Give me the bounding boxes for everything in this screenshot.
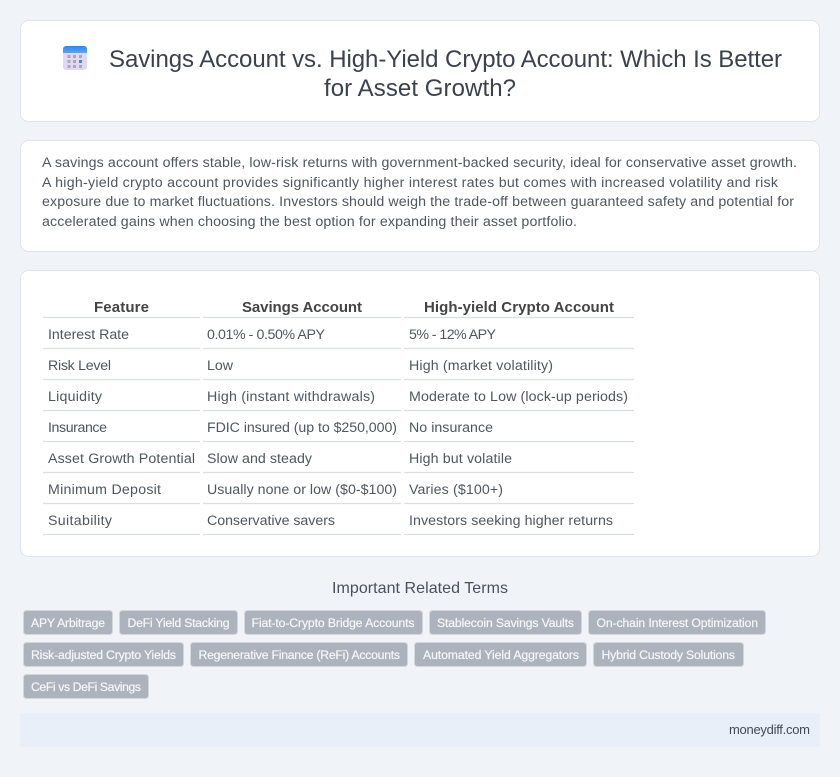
tag: APY Arbitrage: [31, 616, 105, 630]
row: insurance: FDIC insured (up to $250,000): [207, 420, 397, 436]
text block: summary paragraph: accelerated gains when choosing the best option for expanding their asset portfolio.: [42, 214, 577, 230]
row: insurance: Insurance: [48, 420, 107, 436]
tag: CeFi vs DeFi Savings: [31, 680, 141, 694]
table header: High-yield Crypto Account: [424, 299, 614, 316]
panel: summary: [20, 140, 820, 252]
row: liquidity: [48, 389, 628, 405]
tag: DeFi Yield Stacking: [128, 616, 230, 630]
row: liquidity: Moderate to Low (lock-up periods): [409, 389, 628, 405]
row: risk level: [48, 358, 553, 374]
row: suitability: Conservative savers: [207, 513, 335, 529]
tag: Risk-adjusted Crypto Yields: [31, 648, 176, 662]
title: [109, 46, 782, 102]
tag: [24, 610, 112, 634]
row: suitability: [48, 513, 613, 529]
tag: [430, 610, 582, 634]
row: asset growth potential: Slow and steady: [207, 451, 313, 467]
row: insurance: No insurance: [409, 420, 493, 436]
row: interest rate: Interest Rate: [48, 327, 129, 343]
text block: summary paragraph: A savings account offers stable, low-risk returns with government-backed security, ideal for conservative asset growth.: [42, 155, 797, 171]
row: suitability: Investors seeking higher returns: [409, 513, 613, 529]
text block: summary paragraph: [42, 155, 797, 230]
tag: On-chain Interest Optimization: [596, 616, 758, 630]
row: liquidity: Liquidity: [48, 389, 103, 405]
row: insurance: [48, 420, 493, 436]
tag: Regenerative Finance (ReFi) Accounts: [198, 648, 400, 662]
text block: summary paragraph: exposure due to market fluctuations. Investors should weigh the trade-off between guaranteed safety and potential for: [42, 194, 794, 210]
row: interest rate: [48, 327, 497, 343]
tag: [120, 610, 238, 634]
table header: Savings Account: [242, 299, 362, 316]
heading: important related terms: Important Related Terms: [332, 580, 508, 597]
row: interest rate: 5% - 12% APY: [409, 327, 497, 343]
panel: header: [20, 20, 820, 122]
title: Savings Account vs. High-Yield Crypto Account: Which Is Better: [109, 46, 782, 73]
text block: summary paragraph: A high-yield crypto account provides significantly higher interest rates but comes with increased volatility and risk: [42, 175, 779, 191]
row: minimum deposit: Minimum Deposit: [48, 482, 161, 498]
row: asset growth potential: Asset Growth Potential: [48, 451, 195, 467]
footer credit: moneydiff.com: [729, 722, 810, 737]
row: minimum deposit: Usually none or low ($0-$100): [207, 482, 397, 498]
tag: Automated Yield Aggregators: [423, 648, 579, 662]
row: risk level: Low: [207, 358, 234, 374]
tag: Fiat-to-Crypto Bridge Accounts: [252, 616, 414, 630]
footer: [20, 713, 820, 747]
row: asset growth potential: High but volatile: [409, 451, 512, 467]
table header: [94, 299, 614, 316]
row: asset growth potential: [48, 451, 512, 467]
tag: Stablecoin Savings Vaults: [437, 616, 574, 630]
tag: [594, 642, 744, 666]
tag: [190, 642, 408, 666]
title: for Asset Growth?: [324, 75, 516, 102]
tag: [588, 610, 766, 634]
row: minimum deposit: Varies ($100+): [409, 482, 503, 498]
tag: [414, 642, 586, 666]
icon: calendar: [63, 46, 87, 70]
panel: related term tags: [24, 610, 766, 698]
tag: [244, 610, 422, 634]
tag: [24, 642, 184, 666]
row: minimum deposit: [48, 482, 503, 498]
tag: Hybrid Custody Solutions: [602, 648, 735, 662]
tag: [24, 674, 148, 698]
row: suitability: Suitability: [48, 513, 113, 529]
row: risk level: Risk Level: [48, 358, 111, 374]
table header: Feature: [94, 299, 149, 316]
row: interest rate: 0.01% - 0.50% APY: [207, 327, 326, 343]
row: risk level: High (market volatility): [409, 358, 553, 374]
panel: comparison table: [20, 270, 820, 556]
row: liquidity: High (instant withdrawals): [207, 389, 375, 405]
